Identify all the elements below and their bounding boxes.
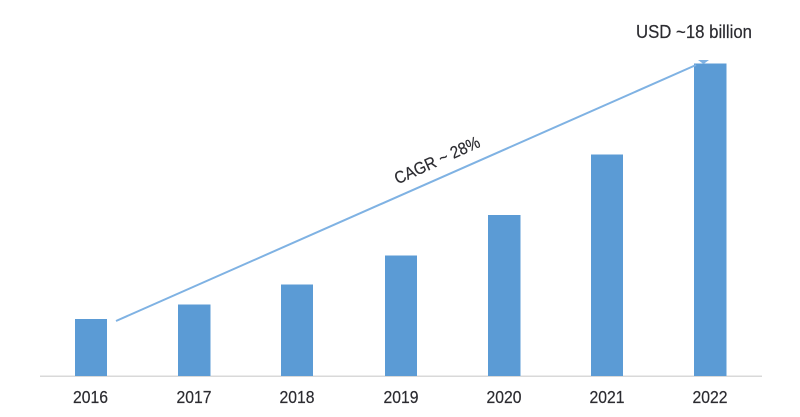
bar: 2016: [75, 319, 107, 376]
CAGR label: CAGR ~ 28%: [391, 133, 483, 188]
bars: [75, 64, 726, 376]
bar: 2021: [591, 154, 623, 376]
label: 2022: 2022: [692, 387, 728, 407]
bar: 2017: [178, 304, 210, 376]
label: 2018: 2018: [280, 387, 314, 407]
growth arrow line: [116, 60, 709, 321]
bar: 2019: [385, 256, 417, 376]
bar: 2020: [488, 215, 520, 376]
label: 2019: 2019: [384, 387, 418, 407]
label: 2020: 2020: [486, 387, 522, 407]
label: 2017: 2017: [176, 387, 212, 407]
bar: 2018: [281, 284, 313, 376]
label: 2021: 2021: [590, 387, 624, 407]
label: 2016: 2016: [73, 387, 108, 407]
chart baseline: [40, 376, 762, 377]
year axis labels: [73, 387, 728, 407]
bar: 2022: [694, 64, 726, 376]
value callout: USD ~18 billion: [636, 22, 752, 42]
